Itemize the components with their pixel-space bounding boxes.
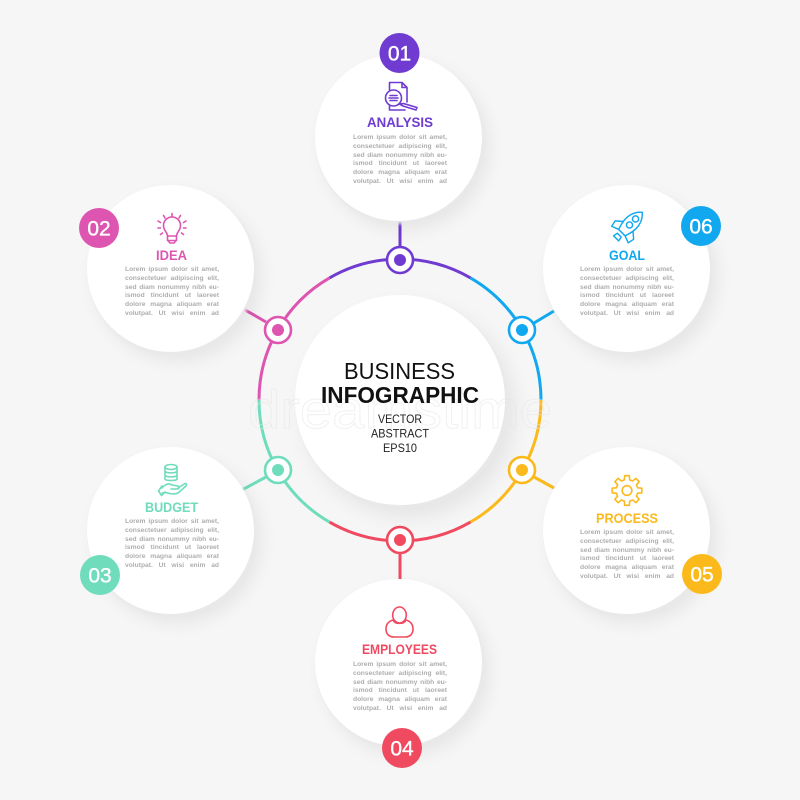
text block: analysis: dolore magna aliquam erat <box>353 169 447 176</box>
text block: process: ismod tincidunt ut laoreet <box>580 555 674 562</box>
text block: goal: Lorem ipsum dolor sit amet, <box>580 266 674 273</box>
text block: idea: dolore magna aliquam erat <box>125 301 219 308</box>
text block: analysis: ismod tincidunt ut laoreet <box>353 160 447 167</box>
panel: idea <box>87 185 254 352</box>
text block: budget: sed diam nonummy nibh eu- <box>125 536 219 542</box>
badge 04: 04 <box>390 738 414 760</box>
text block: goal: consectetuer adipiscing elit, <box>580 275 674 282</box>
badge 05 <box>682 554 722 594</box>
text block: idea: volutpat. Ut wisi enim ad <box>125 310 219 317</box>
panel: budget <box>87 447 254 614</box>
text block: idea: consectetuer adipiscing elit, <box>125 275 219 282</box>
text block: idea: Lorem ipsum dolor sit amet, <box>125 266 219 273</box>
text block: process: consectetuer adipiscing elit, <box>580 538 674 545</box>
text block: employees: dolore magna aliquam erat <box>353 696 447 703</box>
badge 03 <box>80 555 120 595</box>
text block: analysis: Lorem ipsum dolor sit amet, <box>353 134 447 141</box>
text block: process <box>580 529 674 580</box>
badge 02 <box>79 208 119 248</box>
center title: INFOGRAPHIC <box>321 382 479 408</box>
text block: idea: ismod tincidunt ut laoreet <box>125 292 219 299</box>
center title: ABSTRACT <box>371 426 430 440</box>
text block: employees: ismod tincidunt ut laoreet <box>353 687 447 694</box>
text block: budget: volutpat. Ut wisi enim ad <box>125 562 219 569</box>
badge 04 <box>382 728 422 768</box>
watermark: dreamstime <box>248 380 552 440</box>
panel: employees <box>315 579 482 746</box>
icon: rocket <box>607 203 651 248</box>
center title: EPS10 <box>383 441 417 455</box>
text block: budget: consectetuer adipiscing elit, <box>125 527 219 534</box>
badge 01: 01 <box>388 42 411 66</box>
heading: employees: EMPLOYEES <box>362 641 437 657</box>
heading: analysis: ANALYSIS <box>367 114 433 130</box>
panel: analysis <box>315 54 482 221</box>
badge 01 <box>380 33 420 73</box>
text block: goal: sed diam nonummy nibh eu- <box>580 284 674 290</box>
heading: goal: GOAL <box>609 247 645 263</box>
text block: analysis: consectetuer adipiscing elit, <box>353 143 447 150</box>
badge 06: 06 <box>689 216 713 238</box>
heading: budget: BUDGET <box>145 499 198 515</box>
text block: goal: dolore magna aliquam erat <box>580 301 674 308</box>
text block: employees: consectetuer adipiscing elit, <box>353 670 447 677</box>
text block: process: Lorem ipsum dolor sit amet, <box>580 529 674 536</box>
text block: process: dolore magna aliquam erat <box>580 564 674 571</box>
text block: idea <box>125 266 219 317</box>
text block: idea: sed diam nonummy nibh eu- <box>125 284 219 290</box>
text block: employees: volutpat. Ut wisi enim ad <box>353 705 447 712</box>
panel: goal <box>543 185 710 352</box>
text block: budget: ismod tincidunt ut laoreet <box>125 544 219 551</box>
badge 02: 02 <box>87 218 111 240</box>
panel: process <box>543 447 710 614</box>
text block: budget: Lorem ipsum dolor sit amet, <box>125 518 219 525</box>
icon: document with magnifier <box>386 82 417 110</box>
text block: budget: dolore magna aliquam erat <box>125 553 219 560</box>
icon: light bulb <box>158 214 186 243</box>
icon: hand holding coins <box>158 464 187 496</box>
text block: employees: sed diam nonummy nibh eu- <box>353 678 447 686</box>
text block: analysis: volutpat. Ut wisi enim ad <box>353 178 447 185</box>
badge 03: 03 <box>88 564 112 588</box>
badge 05: 05 <box>690 564 714 586</box>
badge 06 <box>681 206 721 246</box>
text block: employees: Lorem ipsum dolor sit amet, <box>353 661 447 668</box>
heading: process: PROCESS <box>596 510 658 526</box>
text block: goal: ismod tincidunt ut laoreet <box>580 292 674 299</box>
icon: person <box>386 607 413 637</box>
icon: gear <box>612 476 642 505</box>
text block: process: volutpat. Ut wisi enim ad <box>580 573 674 580</box>
center title: VECTOR <box>378 412 422 426</box>
text block: budget <box>125 518 219 569</box>
center title: BUSINESS <box>344 358 455 384</box>
text block: analysis: sed diam nonummy nibh eu- <box>353 152 447 158</box>
text block: process: sed diam nonummy nibh eu- <box>580 546 674 554</box>
heading: idea: IDEA <box>156 247 187 263</box>
text block: analysis <box>353 134 447 185</box>
text block: goal <box>580 266 674 317</box>
text block: employees <box>353 661 447 712</box>
center panel <box>295 295 505 505</box>
text block: goal: volutpat. Ut wisi enim ad <box>580 310 674 317</box>
